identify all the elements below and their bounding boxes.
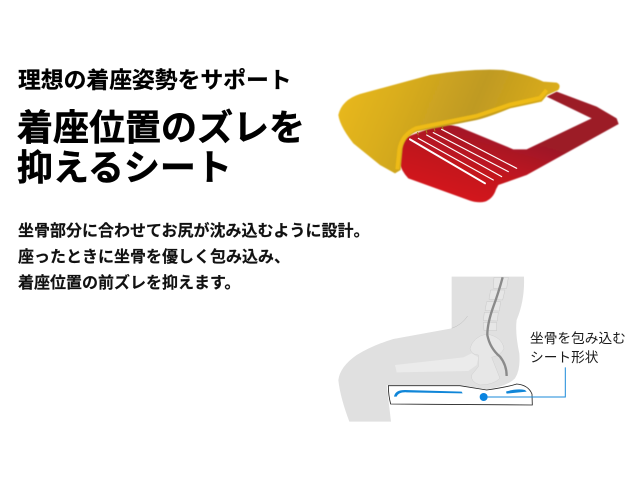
yellow edge highlight bbox=[397, 90, 547, 169]
body silhouette bbox=[338, 277, 524, 422]
spinal cord bbox=[487, 277, 507, 376]
callout dot bbox=[480, 393, 488, 401]
text: シート形状 bbox=[530, 350, 599, 365]
body text: 座ったときに坐骨を優しく包み込み、 bbox=[18, 249, 290, 266]
yellow cushion top bbox=[338, 70, 560, 173]
vertebrae bbox=[483, 277, 508, 331]
main heading bbox=[17, 106, 305, 188]
white slits bbox=[410, 129, 517, 183]
body text: 着座位置の前ズレを抑えます。 bbox=[18, 275, 240, 292]
blue foam sections bbox=[394, 389, 527, 397]
waist crease bbox=[452, 316, 468, 328]
seat outline bbox=[388, 384, 532, 405]
pelvis bbox=[470, 334, 504, 385]
red seat frame bbox=[398, 92, 619, 202]
subtitle: 理想の着座姿勢をサポート bbox=[18, 67, 292, 93]
comb notches bbox=[417, 126, 443, 135]
illustration: seat cushion bbox=[338, 70, 619, 202]
callout label: 坐骨を包み込む bbox=[530, 331, 626, 346]
thigh bone bbox=[395, 353, 478, 372]
main heading: 着座位置のズレを bbox=[17, 106, 305, 148]
body text: 坐骨部分に合わせてお尻が沈み込むように設計。 bbox=[18, 223, 370, 240]
illustration: seated body cross-section bbox=[338, 277, 565, 422]
body text bbox=[18, 222, 370, 292]
callout leader bbox=[484, 367, 565, 397]
main heading: 抑えるシート bbox=[17, 146, 232, 188]
